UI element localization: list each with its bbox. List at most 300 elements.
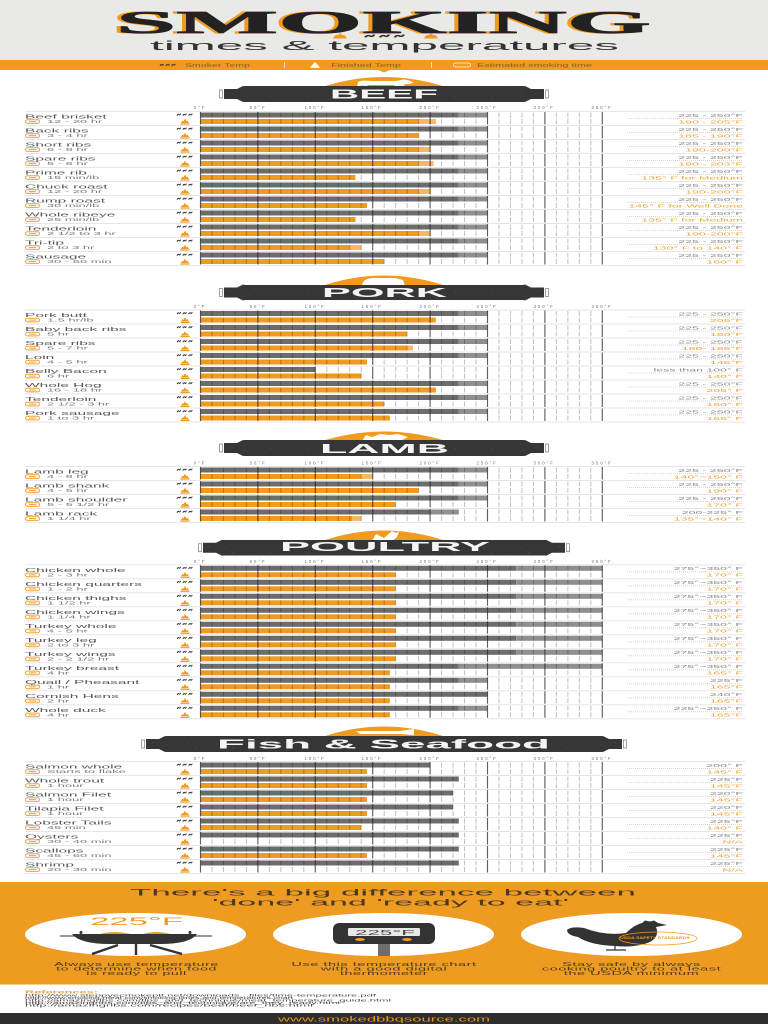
- row: Beef brisket: 12 - 20 hr: [47, 119, 103, 124]
- row: Chicken quarters: 170° F: [706, 587, 743, 592]
- row: Beef brisket: 225 - 250°F: [678, 113, 743, 118]
- row: Whole ribeye: 225 - 250°F: [678, 211, 743, 216]
- axis: lamb: 250°F: [476, 460, 498, 466]
- row: Turkey breast: [25, 662, 745, 676]
- panel: lamb: [25, 432, 745, 523]
- row: Turkey leg: 170° F: [706, 643, 743, 648]
- row: Lobster Tails: [25, 817, 745, 831]
- axis: pork: 0°F: [194, 304, 206, 309]
- row: Turkey breast: 275°~350° F: [674, 664, 743, 669]
- text: grill caption: [54, 961, 219, 977]
- banner: fish and seafood: Fish & Seafood: [217, 736, 550, 752]
- text: chicken caption: the USDA minimum: [564, 971, 699, 976]
- text: thermometer caption: thermometer: [340, 971, 428, 976]
- row: Oysters: 225°F: [710, 833, 743, 838]
- row: Shrimp: 20 - 30 min: [47, 867, 112, 872]
- row: Tenderloin: Tenderloin: [25, 397, 96, 403]
- row: Salmon whole: Starts to flake: [47, 769, 126, 774]
- heading: [130, 888, 636, 908]
- text: chicken caption: Stay safe by always: [562, 962, 701, 967]
- heading: 'done' and 'ready to eat': [212, 898, 570, 908]
- row: Lamb leg: 4 - 8 hr: [47, 474, 89, 479]
- header background: [0, 0, 768, 60]
- row: Rump roast: [25, 195, 745, 209]
- row: Pork sausage: 1 to 3 hr: [47, 416, 95, 421]
- row: Chicken whole: 170° F: [706, 573, 743, 578]
- row: Lobster Tails: 140° F: [706, 825, 743, 830]
- icon: digital thermometer: [273, 913, 494, 956]
- row: Loin: 145°F: [710, 360, 743, 365]
- row: Chuck roast: Chuck roast: [25, 185, 109, 190]
- banner: lamb: [220, 432, 548, 456]
- icon: chicken with USDA stamp: USDA SAFETY STANDARDS: [620, 935, 690, 940]
- footer: www.smokedbbqsource.com: [276, 1016, 490, 1024]
- row: Cornish Hens: 2 hr: [47, 699, 70, 704]
- row: Lamb shoulder: 225 - 250°F: [678, 496, 743, 501]
- row: Whole duck: 4 hr: [47, 713, 70, 718]
- row: Tilapia Filet: 220°F: [710, 805, 743, 810]
- text: grill caption: is ready to pull: [86, 970, 187, 977]
- row: Spare ribs: [25, 338, 745, 351]
- references: References:: [25, 990, 99, 994]
- row: Lamb leg: 225 - 250°F: [678, 468, 743, 473]
- icon: grill: [25, 913, 246, 956]
- panel: beef: [25, 77, 745, 266]
- row: Loin: Loin: [25, 355, 54, 361]
- row: Whole ribeye: [25, 209, 745, 223]
- row: Shrimp: 225°F: [710, 861, 743, 866]
- axis: fish: 50°F: [250, 756, 266, 761]
- icon: grill: 225°F: [90, 916, 184, 928]
- row: Tilapia Filet: 145°F: [710, 811, 743, 816]
- title: SMOKING: SMOKING: [113, 4, 648, 40]
- row: Chicken wings: [25, 606, 745, 620]
- row: Scallops: 145°F: [710, 853, 743, 858]
- row: Tri-tip: Tri-tip: [25, 241, 64, 246]
- row: Oysters: Oysters: [25, 835, 79, 840]
- row: Turkey whole: 275°~350° F: [674, 622, 743, 627]
- axis: beef: 100°F: [304, 105, 326, 110]
- row: Whole Hog: [25, 380, 745, 393]
- row: Chicken whole: 275°~350° F: [674, 566, 743, 571]
- row: Salmon whole: Salmon whole: [25, 765, 122, 770]
- icon: smoke and flames under title: [333, 33, 438, 38]
- row: Whole ribeye: Whole ribeye: [25, 213, 115, 218]
- row: Loin: 4 - 5 hr: [47, 360, 89, 365]
- row: Whole Hog: 16 - 18 hr: [47, 388, 103, 393]
- row: Spare ribs: 190 - 203°F: [678, 161, 743, 166]
- text: thermometer caption: with a good digital: [319, 966, 447, 972]
- row: Whole trout: Whole trout: [25, 779, 105, 784]
- axis: fish: 300°F: [533, 756, 555, 761]
- row: Chicken wings: Chicken wings: [25, 610, 125, 615]
- panel: pork: [25, 276, 745, 422]
- axis: poultry: 300°F: [533, 559, 555, 564]
- row: Tenderloin: 2 1/2 to 3 hr: [47, 231, 117, 236]
- row: Spare ribs: [25, 153, 745, 167]
- row: Tenderloin: Tenderloin: [25, 227, 96, 232]
- row: Salmon whole: 200° F: [706, 763, 743, 768]
- row: Lamb leg: [25, 466, 745, 480]
- axis: poultry: 250°F: [476, 559, 498, 564]
- row: Short ribs: 225 - 250°F: [678, 141, 743, 146]
- banner: beef: [220, 77, 548, 102]
- row: Beef brisket: Beef brisket: [25, 115, 108, 120]
- row: Prime rib: 15 min/lb: [47, 175, 99, 180]
- row: Lamb shoulder: 170° F: [706, 502, 743, 507]
- row: Short ribs: [25, 139, 745, 153]
- row: Lamb shank: [25, 480, 745, 494]
- references: [25, 990, 392, 1008]
- row: Whole duck: 165°F: [710, 713, 743, 718]
- row: Chuck roast: 190-200°F: [685, 189, 743, 194]
- row: Chicken whole: Chicken whole: [25, 568, 126, 573]
- axis: pork: 300°F: [533, 304, 555, 309]
- row: Quail / Pheasant: 225°F: [710, 678, 743, 683]
- icon: digital thermometer: 225°F: [355, 928, 416, 937]
- axis: beef: 150°F: [361, 105, 383, 110]
- footer: [0, 1013, 768, 1024]
- row: Salmon Filet: 1 hour: [47, 797, 85, 802]
- axis: fish: 200°F: [419, 756, 441, 761]
- references: http://www.smoking-meat.com/smoking-times-and-temperatures-chart: [25, 996, 293, 1000]
- axis: lamb: 200°F: [419, 460, 441, 466]
- axis: pork: 350°F: [591, 304, 613, 309]
- row: Chicken whole: 2 - 3 hr: [47, 573, 89, 578]
- row: Short ribs: 190-200°F: [685, 147, 743, 152]
- subtitle: times & temperatures: [150, 39, 619, 53]
- row: Whole Hog: 225 - 250°F: [678, 381, 743, 386]
- axis: pork: 50°F: [250, 304, 266, 309]
- row: Whole duck: 225°~250° F: [674, 706, 743, 711]
- row: Tilapia Filet: 1 hour: [47, 811, 85, 816]
- row: Chicken wings: 275°~350° F: [674, 608, 743, 613]
- row: Chuck roast: [25, 181, 745, 195]
- references: http://www.steppyecmokepit.net/downloads...files/time-temperature.pdf: [25, 994, 376, 998]
- row: Lamb rack: 200-225° F: [682, 510, 743, 515]
- row: Lobster Tails: Lobster Tails: [25, 821, 112, 826]
- row: Back ribs: 3 - 4 hr: [47, 133, 89, 138]
- row: Turkey wings: 170° F: [706, 657, 743, 662]
- row: Turkey wings: 275°~350° F: [674, 650, 743, 655]
- axis: lamb: 350°F: [591, 460, 613, 466]
- row: Chicken thighs: 1 1/2 hr: [47, 601, 92, 606]
- text: chicken caption: cooking poultry to at least: [542, 966, 721, 972]
- axis: beef: 200°F: [419, 105, 441, 110]
- row: Lamb shoulder: 5 - 5 1/2 hr: [47, 502, 110, 507]
- row: Turkey wings: Turkey wings: [25, 652, 116, 657]
- row: Pork sausage: [25, 408, 745, 421]
- row: Belly Bacon: 6 hr: [47, 374, 70, 379]
- axis: poultry: 200°F: [419, 559, 441, 564]
- title: SMOKING: [113, 4, 651, 40]
- row: Tenderloin: [25, 223, 745, 237]
- axis: poultry: 50°F: [250, 559, 266, 564]
- axis: fish: 350°F: [591, 756, 613, 761]
- row: Chicken quarters: 1 - 2 hr: [47, 587, 89, 592]
- row: Lamb rack: [25, 508, 745, 522]
- row: Spare ribs: Spare ribs: [25, 157, 96, 162]
- row: Prime rib: 135° F for Medium: [641, 175, 743, 180]
- row: Chicken thighs: Chicken thighs: [25, 596, 127, 601]
- row: Spare ribs: 5 - 7 hr: [47, 346, 89, 351]
- references: http://amazingribs.com/tips_and_technique/meat_temperature_guide.html: [25, 998, 392, 1002]
- row: Turkey wings: [25, 648, 745, 662]
- row: Salmon Filet: 145°F: [710, 797, 743, 802]
- row: Shrimp: Shrimp: [25, 863, 74, 868]
- axis: beef: 300°F: [533, 105, 555, 110]
- row: Lamb shoulder: [25, 494, 745, 508]
- row: Tri-tip: 2 to 3 hr: [47, 245, 95, 250]
- row: Cornish Hens: 240°F: [710, 692, 743, 697]
- row: Salmon whole: 145° F: [706, 769, 743, 774]
- banner: pork: [220, 276, 548, 300]
- row: Oysters: [25, 831, 745, 845]
- row: Turkey breast: 165° F: [706, 671, 743, 676]
- text: chicken caption: [542, 962, 721, 976]
- row: Quail / Pheasant: [25, 676, 745, 690]
- row: Pork sausage: Pork sausage: [25, 411, 120, 417]
- axis: poultry: 350°F: [591, 559, 613, 564]
- row: Prime rib: 225 - 250°F: [678, 169, 743, 174]
- row: Turkey leg: Turkey leg: [25, 638, 97, 643]
- row: Salmon Filet: 220°F: [710, 791, 743, 796]
- row: Lamb shoulder: Lamb shoulder: [25, 498, 128, 503]
- axis: beef: 0°F: [194, 105, 206, 110]
- row: Whole Hog: 205° F: [706, 388, 743, 393]
- row: Lamb leg: Lamb leg: [25, 470, 89, 475]
- axis: poultry: 150°F: [361, 559, 383, 564]
- row: Short ribs: Short ribs: [25, 143, 92, 148]
- text: thermometer caption: Use this temperature chart: [291, 962, 477, 967]
- row: Chicken whole: [25, 564, 745, 578]
- row: Baby back ribs: 5 hr: [47, 332, 70, 337]
- row: Spare ribs: 180- 185°F: [682, 346, 743, 351]
- panel: fish and seafood: [25, 726, 745, 874]
- row: Pork sausage: 225 - 250°F: [678, 409, 743, 414]
- banner: poultry: [198, 530, 570, 556]
- row: Whole trout: [25, 775, 745, 789]
- axis: pork: 250°F: [476, 304, 498, 309]
- axis: fish: 250°F: [476, 756, 498, 761]
- row: Salmon Filet: [25, 789, 745, 803]
- row: Pork butt: Pork butt: [25, 313, 88, 319]
- row: Salmon Filet: Salmon Filet: [25, 793, 112, 798]
- text: grill caption: to determine when food: [56, 966, 217, 972]
- banner: lamb: LAMB: [320, 441, 449, 456]
- row: Rump roast: Rump roast: [25, 199, 106, 204]
- axis: poultry: 0°F: [194, 559, 206, 564]
- axis: poultry: 100°F: [304, 559, 326, 564]
- panel: poultry: [25, 530, 745, 719]
- row: Whole duck: [25, 704, 745, 718]
- row: Tenderloin: 2 1/2 - 3 hr: [47, 402, 110, 407]
- row: Lamb leg: 140°~150° F: [674, 474, 743, 479]
- axis: beef: 50°F: [250, 105, 266, 110]
- row: Pork sausage: 165° F: [706, 416, 743, 421]
- row: Lamb shank: 225 - 250°F: [678, 482, 743, 487]
- row: Tenderloin: 160° F: [706, 402, 743, 407]
- row: Oysters: 30 - 40 min: [47, 839, 112, 844]
- row: Lamb rack: Lamb rack: [25, 512, 98, 517]
- row: Baby back ribs: 225 - 250°F: [678, 325, 743, 330]
- row: Turkey whole: 4 - 5 hr: [47, 629, 89, 634]
- axis: lamb: 0°F: [194, 460, 206, 466]
- row: Salmon whole: [25, 761, 745, 775]
- row: Baby back ribs: [25, 324, 745, 337]
- row: Scallops: 225°F: [710, 847, 743, 852]
- row: Oysters: N/A: [722, 839, 744, 844]
- row: Turkey wings: 2 - 2 1/2 hr: [47, 657, 110, 662]
- text: thermometer caption: [291, 962, 477, 976]
- row: Prime rib: Prime rib: [25, 171, 87, 176]
- row: Back ribs: [25, 125, 745, 139]
- row: Prime rib: [25, 167, 745, 181]
- row: Chicken thighs: 170° F: [706, 601, 743, 606]
- row: Pork butt: 225 - 250°F: [678, 311, 743, 316]
- title: SMOKING: SMOKING: [116, 4, 651, 40]
- row: Lobster Tails: 225°F: [710, 819, 743, 824]
- banner: fish and seafood: [142, 726, 626, 752]
- row: Chicken wings: 1 1/4 hr: [47, 615, 92, 620]
- row: Chicken thighs: 275°~350° F: [674, 594, 743, 599]
- row: Chicken quarters: 275°~350° F: [674, 580, 743, 585]
- row: Sausage: Sausage: [25, 255, 86, 260]
- row: Sausage: 30 - 60 min: [47, 259, 112, 264]
- row: Back ribs: 185 - 190°F: [678, 133, 743, 138]
- row: Lamb rack: 1 1/4 hr: [47, 516, 92, 521]
- panel: done vs ready to eat: [0, 882, 768, 984]
- axis: fish: 100°F: [304, 756, 326, 761]
- axis: fish: 0°F: [194, 756, 206, 761]
- row: Whole ribeye: 135° F for Medium: [641, 217, 743, 222]
- row: Tilapia Filet: [25, 803, 745, 817]
- row: Turkey leg: 275°~350° F: [674, 636, 743, 641]
- axis: lamb: 300°F: [533, 460, 555, 466]
- row: Tenderloin: 225 - 250°F: [678, 225, 743, 230]
- axis: lamb: 50°F: [250, 460, 266, 466]
- row: Beef brisket: 190 - 205°F: [678, 119, 743, 124]
- row: Chicken quarters: [25, 578, 745, 592]
- row: Lamb shank: Lamb shank: [25, 484, 110, 489]
- icon: chicken with USDA stamp: [521, 913, 742, 956]
- row: Tenderloin: [25, 394, 745, 407]
- row: Lamb rack: 135°~140° F: [674, 516, 743, 521]
- row: Turkey leg: 2 to 3 hr: [47, 643, 95, 648]
- row: Turkey whole: [25, 620, 745, 634]
- row: Belly Bacon: [25, 366, 745, 379]
- row: Spare ribs: Spare ribs: [25, 341, 96, 347]
- row: Rump roast: 145° F for Well Done: [628, 203, 743, 208]
- row: Shrimp: [25, 859, 745, 873]
- row: Belly Bacon: less than 100° F: [654, 367, 743, 372]
- row: Tri-tip: [25, 237, 745, 251]
- row: Rump roast: 30 min/lb: [47, 203, 99, 208]
- row: Turkey leg: [25, 634, 745, 648]
- banner: poultry: POULTRY: [280, 539, 491, 554]
- row: Shrimp: N/A: [722, 867, 744, 872]
- axis: beef: 350°F: [591, 105, 613, 110]
- row: Sausage: 225 - 250°F: [678, 253, 743, 258]
- row: Belly Bacon: 140° F: [706, 374, 743, 379]
- row: Turkey breast: Turkey breast: [25, 666, 120, 671]
- row: Loin: 225 - 250°F: [678, 353, 743, 358]
- row: Quail / Pheasant: Quail / Pheasant: [25, 680, 141, 685]
- row: Turkey whole: Turkey whole: [25, 624, 116, 629]
- references: http://amazingribs.com/tips_and_technique/are_they_ready.html: [25, 1001, 341, 1005]
- legend strip: Smoker Temp: [185, 63, 250, 69]
- row: Whole ribeye: 25 min/lb: [47, 217, 99, 222]
- row: Turkey breast: 4 hr: [47, 671, 70, 676]
- row: Scallops: [25, 845, 745, 859]
- row: Cornish Hens: 165°F: [710, 699, 743, 704]
- row: Tenderloin: 225 - 250°F: [678, 395, 743, 400]
- axis: lamb: 100°F: [304, 460, 326, 466]
- axis: beef: 250°F: [476, 105, 498, 110]
- row: Whole trout: 1 hour: [47, 783, 85, 788]
- heading: There's a big difference between: [130, 888, 636, 898]
- row: Rump roast: 225 - 250°F: [678, 197, 743, 202]
- row: Pork butt: 1.5 hr/lb: [47, 318, 94, 323]
- row: Beef brisket: [25, 111, 745, 125]
- row: Chicken wings: 170° F: [706, 615, 743, 620]
- row: Whole trout: 145°F: [710, 783, 743, 788]
- axis: fish: 150°F: [361, 756, 383, 761]
- row: Spare ribs: 5 - 6 hr: [47, 161, 89, 166]
- row: Turkey whole: 170° F: [706, 629, 743, 634]
- row: Spare ribs: 225 - 250°F: [678, 339, 743, 344]
- row: Cornish Hens: Cornish Hens: [25, 694, 119, 699]
- legend strip: Estimated smoking time: [477, 63, 592, 69]
- row: Chicken quarters: Chicken quarters: [25, 582, 142, 587]
- row: Tenderloin: 190-200°F: [685, 231, 743, 236]
- row: Pork butt: [25, 310, 745, 323]
- axis: pork: 200°F: [419, 304, 441, 309]
- row: Baby back ribs: Baby back ribs: [25, 327, 127, 333]
- row: Spare ribs: 225 - 250°F: [678, 155, 743, 160]
- row: Short ribs: 6 - 8 hr: [47, 147, 89, 152]
- row: Whole trout: 225°F: [710, 777, 743, 782]
- axis: pork: 150°F: [361, 304, 383, 309]
- row: Belly Bacon: Belly Bacon: [25, 369, 107, 375]
- row: Back ribs: 225 - 250°F: [678, 127, 743, 132]
- row: Chicken thighs: [25, 592, 745, 606]
- row: Tri-tip: 130° F to 140° F: [653, 245, 743, 250]
- row: Scallops: 45 - 60 min: [47, 853, 112, 858]
- banner: beef: BEEF: [330, 86, 438, 102]
- row: Quail / Pheasant: 165°F: [710, 685, 743, 690]
- row: Tri-tip: 225 - 250°F: [678, 239, 743, 244]
- row: Baby back ribs: 180°F: [710, 332, 743, 337]
- row: Chuck roast: 12 - 20 hr: [47, 189, 103, 194]
- row: Lamb shank: 4 - 5 hr: [47, 488, 89, 493]
- row: Whole Hog: Whole Hog: [25, 383, 102, 389]
- row: Cornish Hens: [25, 690, 745, 704]
- axis: pork: 100°F: [304, 304, 326, 309]
- row: Sausage: 160° F: [706, 259, 743, 264]
- legend strip: [0, 60, 768, 72]
- axis: lamb: 150°F: [361, 460, 383, 466]
- references: http://amazingribs.com/recipes/beef/beef_ribs.html: [25, 1004, 314, 1008]
- text: grill caption: Always use temperature: [54, 961, 219, 968]
- row: Tilapia Filet: Tilapia Filet: [25, 807, 105, 812]
- row: Scallops: Scallops: [25, 849, 84, 854]
- row: Quail / Pheasant: 1 hr: [47, 685, 70, 690]
- row: Loin: [25, 352, 745, 365]
- row: Lobster Tails: 45 min: [47, 825, 86, 830]
- row: Lamb shank: 190° F: [706, 488, 743, 493]
- legend strip: Finished Temp: [331, 63, 401, 69]
